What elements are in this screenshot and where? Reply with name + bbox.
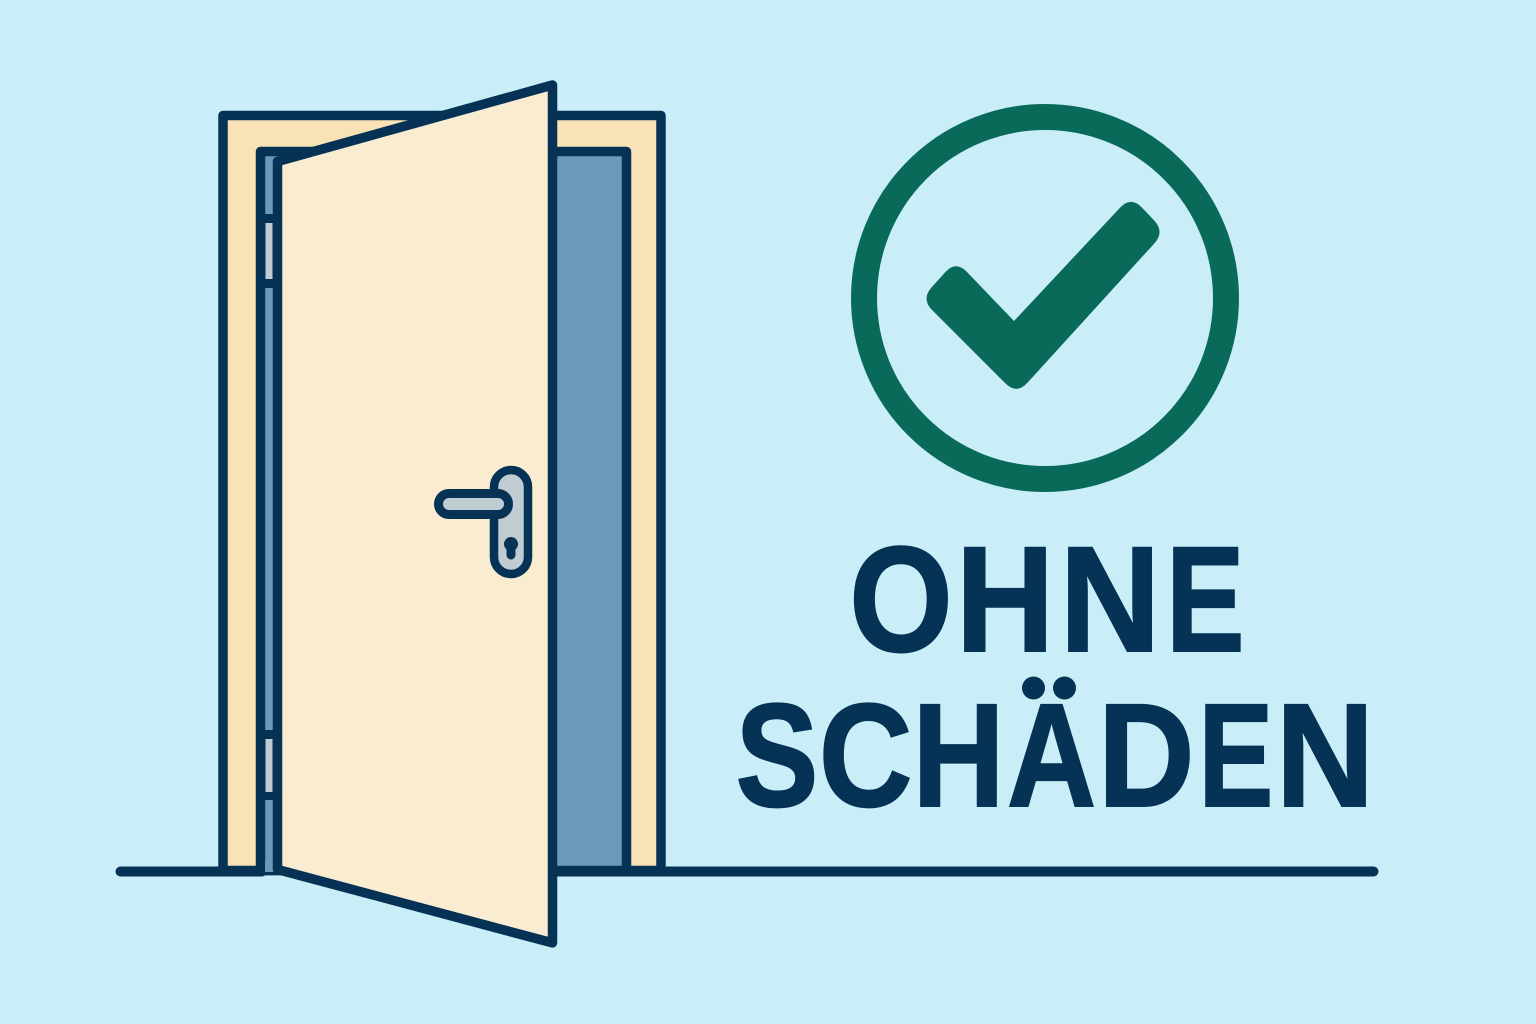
keyhole: [504, 537, 518, 560]
door frame: [223, 116, 661, 870]
door opening: [260, 152, 626, 870]
heading: OHNE: N: [1060, 515, 1160, 683]
heading: OHNE: E: [1166, 515, 1244, 683]
icon: check mark in circle: [864, 117, 1226, 479]
heading: SCHÄDEN: Ä: [1007, 673, 1096, 837]
heading: SCHÄDEN: C: [819, 673, 912, 837]
heading: SCHÄDEN: H: [912, 673, 1005, 837]
heading: SCHÄDEN: E: [1198, 673, 1273, 837]
door leaf: [278, 85, 552, 943]
heading: OHNE: H: [956, 515, 1054, 683]
upper hinge: [264, 214, 276, 288]
heading: OHNE: O: [849, 515, 953, 683]
door handle: [438, 470, 528, 574]
heading: SCHÄDEN: S: [736, 673, 818, 837]
heading: SCHÄDEN: N: [1276, 673, 1374, 837]
lower hinge: [264, 730, 276, 800]
heading: SCHÄDEN: D: [1098, 673, 1195, 837]
floor line: [120, 860, 1374, 872]
lever: [438, 494, 508, 514]
handle plate: [494, 470, 528, 574]
heading: OHNE: [849, 515, 1244, 683]
